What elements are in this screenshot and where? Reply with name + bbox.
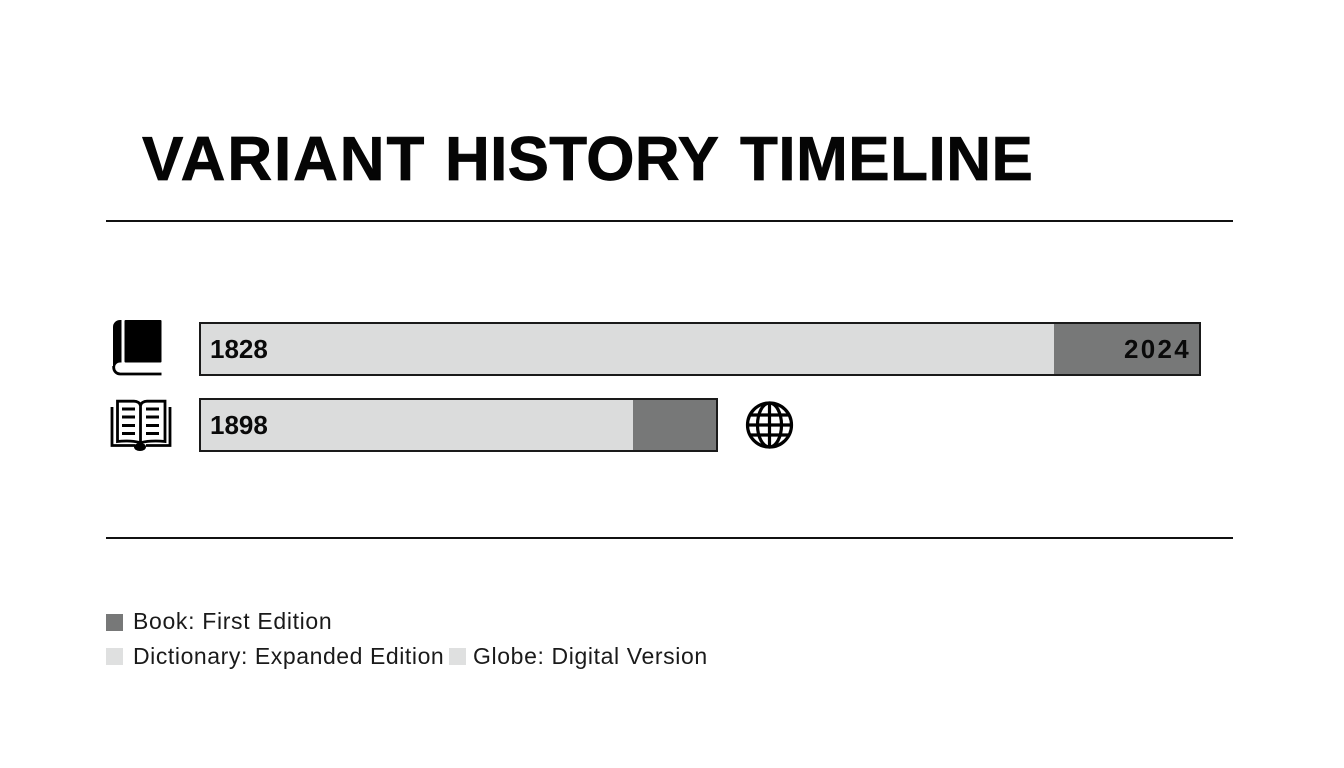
title: TIMELINE xyxy=(740,125,1033,194)
legend swatch: book xyxy=(106,614,123,631)
icon: closed book xyxy=(112,320,162,376)
legend xyxy=(106,608,708,669)
legend label: globe: Globe: Digital Version xyxy=(473,643,708,669)
end year 2024: 2024 xyxy=(1124,334,1191,364)
timeline bar: 1898 xyxy=(199,398,718,452)
start year 1898: 1898 xyxy=(210,410,268,440)
legend swatch: globe xyxy=(449,648,466,665)
title: HISTORY xyxy=(445,125,719,194)
legend swatch: dictionary xyxy=(106,648,123,665)
legend label: dictionary: Dictionary: Expanded Edition xyxy=(133,643,444,669)
title: VARIANT xyxy=(142,125,426,194)
segment: digital version xyxy=(633,400,716,450)
segment: first edition xyxy=(1054,324,1199,374)
timeline bar: 1828 to 2024 xyxy=(199,322,1201,376)
legend label: book: Book: First Edition xyxy=(133,608,332,634)
icon: open dictionary xyxy=(110,400,172,451)
icon: globe xyxy=(746,401,794,449)
start year 1828: 1828 xyxy=(210,334,268,364)
title xyxy=(142,125,1033,194)
